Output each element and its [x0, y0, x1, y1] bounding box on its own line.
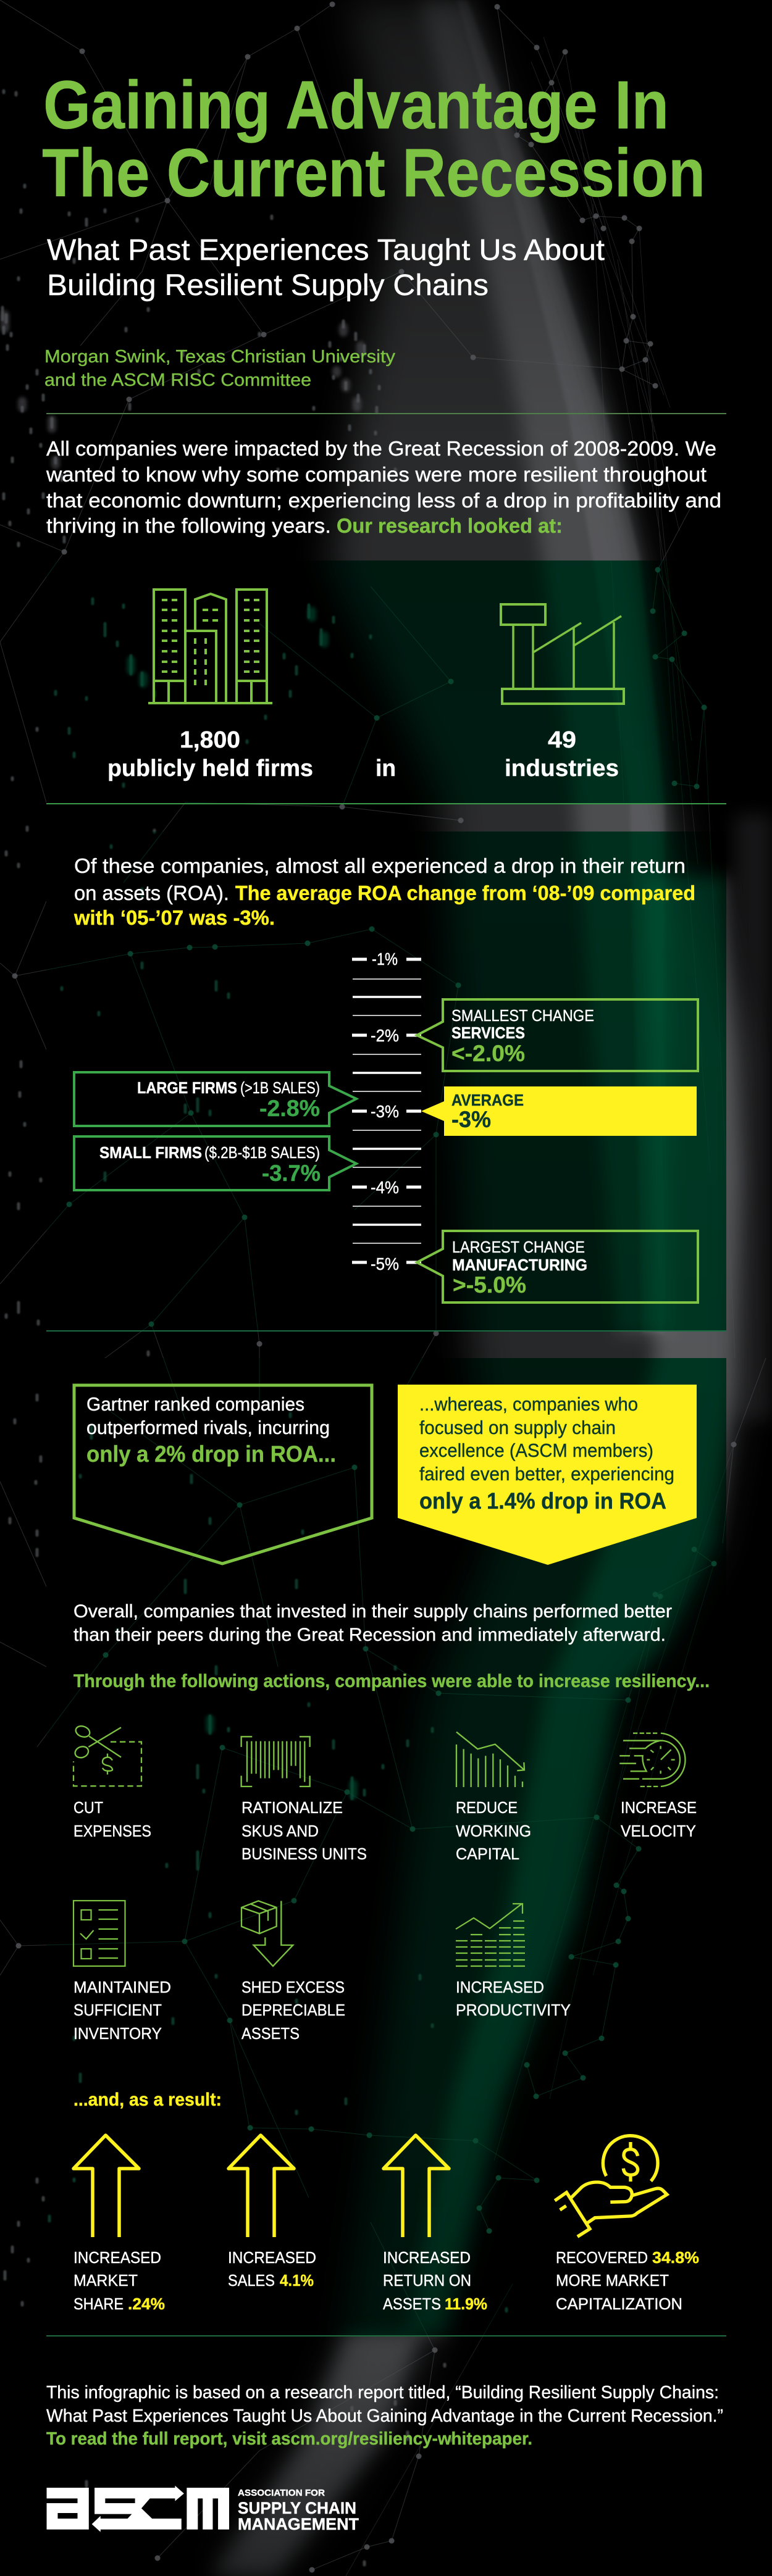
- icon: rising chart: [456, 1904, 525, 1966]
- panel: Gartner ranked companies: only a 2% drop in ROA...: [86, 1441, 336, 1467]
- result: return on assets: [383, 2135, 487, 2313]
- panel: Gartner ranked companies: outperformed rivals, incurring: [86, 1417, 330, 1438]
- action: rationalize SKUs: SKUS AND: [241, 1822, 319, 1840]
- result: sales: SALES: [228, 2271, 275, 2290]
- callout: small firms: [74, 1136, 356, 1190]
- action: shed excess depreciable assets: ASSETS: [241, 2024, 300, 2043]
- overall statement: Overall, companies that invested in their supply chains performed better: [73, 1601, 672, 1622]
- intro paragraph: Our research looked at:: [337, 514, 563, 537]
- result: market capitalization: RECOVERED: [556, 2248, 648, 2267]
- icon: checklist: [73, 1901, 125, 1966]
- subtitle: Building Resilient Supply Chains: [47, 269, 489, 302]
- result: market share: [73, 2135, 165, 2313]
- callout: large firms: -2.8%: [259, 1096, 320, 1121]
- panel: ASCM members: faired even better, experiencing: [419, 1463, 674, 1485]
- action: reduce working capital: [456, 1732, 531, 1863]
- icon: declining bar chart: [456, 1732, 524, 1787]
- callout: average: [421, 1086, 697, 1136]
- results heading: ...and, as a result:: [73, 2090, 222, 2110]
- callout: largest change manufacturing: LARGEST CHANGE: [452, 1238, 585, 1256]
- action: cut expenses: EXPENSES: [73, 1822, 151, 1840]
- action: rationalize SKUs: RATIONALIZE: [241, 1798, 343, 1817]
- result: sales: [228, 2135, 316, 2290]
- chart: ROA change scale: -2%: [371, 1026, 399, 1045]
- action: shed excess depreciable assets: SHED EXCESS: [241, 1978, 345, 1996]
- footer source note: To read the full report, visit ascm.org/resiliency-whitepaper.: [46, 2429, 532, 2449]
- panel: ASCM members: only a 1.4% drop in ROA: [419, 1488, 666, 1514]
- action: maintained sufficient inventory: SUFFICIENT: [73, 2001, 162, 2019]
- action: reduce working capital: CAPITAL: [456, 1844, 519, 1863]
- intro paragraph: that economic downturn; experiencing less of a drop in profitability and: [46, 489, 721, 512]
- chart: ROA change scale: -5%: [371, 1254, 399, 1273]
- action: increased productivity: INCREASED: [456, 1978, 544, 1996]
- action: maintained sufficient inventory: [73, 1901, 171, 2043]
- action: maintained sufficient inventory: MAINTAINED: [73, 1978, 171, 1996]
- result: sales: INCREASED: [228, 2248, 316, 2267]
- result: market capitalization: [555, 2136, 699, 2313]
- callout: small firms: SMALL FIRMS: [99, 1143, 202, 1162]
- logo: ASCM: MANAGEMENT: [238, 2515, 359, 2533]
- footer source note: This infographic is based on a research report titled, “Building Resilient Supply Chains:: [46, 2383, 719, 2403]
- icon: hand holding coin: [555, 2136, 667, 2236]
- result: market share: .24%: [128, 2295, 165, 2313]
- logo: ASCM: [47, 2486, 359, 2533]
- stat: 1,800 publicly held firms: [107, 727, 313, 782]
- result: market share: SHARE: [73, 2295, 124, 2313]
- result: return on assets: ASSETS: [383, 2295, 441, 2313]
- result: sales: 4.1%: [280, 2271, 314, 2290]
- ROA intro text: Of these companies, almost all experienced a drop in their return: [74, 854, 686, 877]
- logo: ASCM: SUPPLY CHAIN: [238, 2499, 356, 2517]
- authors: and the ASCM RISC Committee: [44, 370, 311, 390]
- action: increased productivity: [456, 1904, 571, 2019]
- stat: 1,800 publicly held firms: 1,800: [180, 727, 240, 753]
- intro paragraph: All companies were impacted by the Great Recession of 2008-2009. We: [46, 437, 716, 460]
- action: reduce working capital: WORKING: [456, 1822, 531, 1840]
- result: market capitalization: MORE MARKET: [556, 2271, 669, 2290]
- ROA intro text: [73, 854, 695, 929]
- icon: up arrow: [384, 2135, 449, 2237]
- icon: up arrow: [229, 2135, 294, 2237]
- icon: box with down arrow: [241, 1901, 293, 1966]
- authors: [44, 347, 396, 390]
- callout: average: -3%: [451, 1107, 491, 1132]
- action: increase velocity: VELOCITY: [621, 1822, 696, 1840]
- callout: small firms: ($.2B-$1B SALES): [204, 1143, 320, 1162]
- authors: Morgan Swink, Texas Christian University: [44, 347, 396, 367]
- ROA intro text: with ‘05-’07 was -3%.: [73, 906, 275, 929]
- action: increase velocity: INCREASE: [621, 1798, 697, 1817]
- panel: ASCM members: focused on supply chain: [419, 1417, 616, 1438]
- panel: research scope: [107, 590, 624, 782]
- actions heading: Through the following actions, companies were able to increase resiliency...: [73, 1671, 710, 1691]
- footer source note: What Past Experiences Taught Us About Gaining Advantage in the Current Recession.”: [46, 2406, 723, 2426]
- result: return on assets: RETURN ON: [383, 2271, 471, 2290]
- action: cut expenses: [73, 1724, 151, 1840]
- intro paragraph: wanted to know why some companies were more resilient throughout: [46, 463, 707, 486]
- callout: smallest change services: <-2.0%: [451, 1041, 525, 1066]
- connector word: in: in: [376, 756, 396, 782]
- callout: large firms: [74, 1072, 356, 1126]
- action: reduce working capital: REDUCE: [456, 1798, 518, 1817]
- intro paragraph: [46, 437, 721, 537]
- subtitle: What Past Experiences Taught Us About: [47, 234, 605, 267]
- icon: barcode: [241, 1736, 310, 1786]
- stat: 49 industries: [505, 727, 619, 782]
- result: market capitalization: 34.8%: [652, 2248, 699, 2267]
- chart: ROA change scale: -4%: [371, 1178, 399, 1197]
- chart: ROA change scale: [352, 949, 421, 1273]
- callout: large firms: (>1B SALES): [240, 1078, 320, 1097]
- title: The Current Recession: [42, 135, 705, 211]
- panel: ASCM members: ...whereas, companies who: [419, 1393, 638, 1415]
- chart: ROA change scale: -1%: [372, 949, 398, 969]
- action: increase velocity: [619, 1733, 697, 1840]
- icon: scissors and dollar: [73, 1724, 141, 1786]
- title: Gaining Advantage In: [43, 67, 669, 143]
- stat: 1,800 publicly held firms: publicly held firms: [107, 756, 313, 782]
- panel: ASCM members: [398, 1385, 697, 1565]
- action: maintained sufficient inventory: INVENTORY: [73, 2024, 162, 2043]
- subtitle: [47, 234, 605, 302]
- icon: speeding stopwatch: [619, 1733, 685, 1786]
- callout: largest change manufacturing: [417, 1231, 698, 1303]
- footer source note: [46, 2383, 723, 2449]
- logo: ASCM: ASSOCIATION FOR: [238, 2488, 325, 2498]
- overall statement: than their peers during the Great Recession and immediately afterward.: [73, 1625, 666, 1645]
- result: market share: MARKET: [73, 2271, 138, 2290]
- stat: 49 industries: industries: [505, 756, 619, 782]
- panel: Gartner ranked companies: [74, 1385, 372, 1564]
- action: shed excess depreciable assets: DEPRECIABLE: [241, 2001, 345, 2019]
- callout: smallest change services: SERVICES: [451, 1023, 525, 1042]
- overall statement: [73, 1601, 672, 1645]
- icon: up arrow: [73, 2135, 139, 2237]
- result: market capitalization: CAPITALIZATION: [556, 2295, 682, 2313]
- action: cut expenses: CUT: [73, 1798, 103, 1817]
- ROA intro text: The average ROA change from ‘08-’09 compared: [235, 882, 695, 904]
- panel: Gartner ranked companies: Gartner ranked companies: [86, 1393, 304, 1415]
- intro paragraph: thriving in the following years.: [46, 514, 331, 537]
- callout: large firms: LARGE FIRMS: [137, 1078, 237, 1097]
- title: [42, 67, 705, 211]
- callout: largest change manufacturing: >-5.0%: [453, 1272, 526, 1298]
- action: rationalize SKUs: [241, 1736, 367, 1863]
- icon: office buildings: [148, 590, 272, 703]
- ROA intro text: on assets (ROA).: [74, 882, 229, 904]
- callout: smallest change services: [417, 999, 698, 1071]
- callout: smallest change services: SMALLEST CHANGE: [451, 1006, 594, 1025]
- chart: ROA change scale: -3%: [371, 1102, 399, 1121]
- callout: average: AVERAGE: [451, 1091, 524, 1109]
- action: rationalize SKUs: BUSINESS UNITS: [241, 1844, 367, 1863]
- stat: 49 industries: 49: [548, 727, 576, 753]
- callout: small firms: -3.7%: [262, 1161, 321, 1186]
- result: market share: INCREASED: [73, 2248, 161, 2267]
- action: shed excess depreciable assets: [241, 1901, 345, 2043]
- result: return on assets: 11.9%: [445, 2295, 487, 2313]
- result: return on assets: INCREASED: [383, 2248, 471, 2267]
- callout: largest change manufacturing: MANUFACTURING: [452, 1256, 587, 1274]
- panel: ASCM members: excellence (ASCM members): [419, 1440, 653, 1461]
- action: increased productivity: PRODUCTIVITY: [456, 2001, 571, 2019]
- icon: factory: [501, 604, 624, 704]
